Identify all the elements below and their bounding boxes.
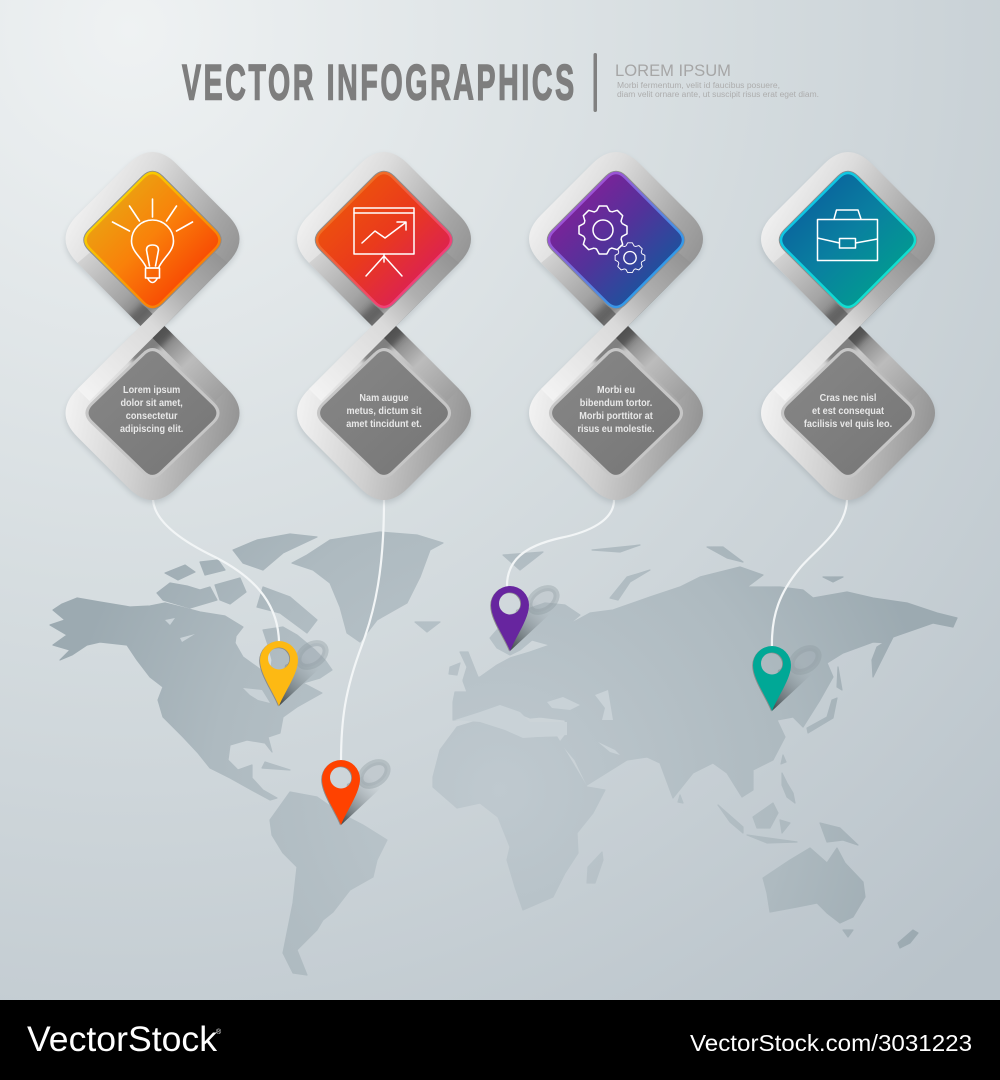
world map [50, 532, 957, 975]
line: teal pin [772, 500, 847, 648]
diamond: teal [781, 173, 915, 307]
icon: gears [579, 206, 645, 273]
map: south america [270, 792, 387, 975]
diamond rim [317, 173, 451, 307]
diamond: grey text panel [782, 350, 914, 476]
text: business: Cras nec nisl [820, 392, 877, 404]
text: settings [577, 384, 655, 435]
text: settings: Morbi eu [597, 384, 635, 396]
connector lines [153, 500, 847, 762]
text: idea: consectetur [126, 410, 178, 422]
diamond: purple [549, 173, 683, 307]
text: presentation: Nam augue [359, 392, 409, 404]
pin: teal [752, 643, 823, 712]
diamond: red [317, 173, 451, 307]
text: business: et est consequat [812, 405, 885, 417]
map: inland seas and lakes [165, 618, 620, 755]
footer registered mark: ® [216, 1028, 222, 1036]
line: purple pin [507, 500, 614, 588]
footer url: VectorStock.com/3031223 [690, 1030, 972, 1056]
title: VECTOR INFOGRAPHICS [182, 54, 574, 111]
pin: yellow [259, 638, 330, 707]
text: presentation: metus, dictum sit [346, 405, 422, 417]
subtitle block [615, 61, 819, 99]
diamond: grey text panel [87, 350, 218, 476]
text: business: facilisis vel quis leo. [804, 418, 892, 430]
map: greenland [292, 532, 443, 642]
line: red pin [341, 500, 384, 762]
map: africa [433, 720, 605, 910]
panel: settings column [529, 152, 703, 503]
diamond: orange [86, 173, 220, 307]
diamond rim [781, 173, 915, 307]
text: idea [120, 384, 184, 435]
text: presentation: amet tincidunt et. [346, 418, 422, 430]
pin: purple [490, 583, 561, 652]
icon: presentation board [354, 208, 414, 276]
subtitle block: Morbi fermentum, velit id faucibus posuere, [617, 81, 780, 90]
panel: business column [761, 152, 935, 503]
text: idea: Lorem ipsum [123, 384, 181, 396]
text: settings: risus eu molestie. [577, 423, 655, 435]
diamond rim [86, 173, 220, 307]
title divider [594, 53, 597, 112]
pin: red [321, 757, 392, 826]
text: business [804, 392, 892, 430]
map: canadian arctic islands [157, 534, 317, 633]
map: north america [50, 598, 332, 800]
text: settings: Morbi porttitor at [579, 410, 653, 422]
subtitle block: diam velit ornare ante, ut suscipit risus erat eget diam. [617, 90, 819, 99]
diamond: grey text panel [318, 350, 450, 476]
footer logo: VectorStock [27, 1020, 218, 1059]
text: idea: dolor sit amet, [120, 397, 183, 409]
footer band [0, 1000, 1000, 1080]
icon: briefcase [818, 210, 878, 260]
subtitle block: LOREM IPSUM [615, 61, 731, 80]
map: islands [262, 545, 918, 948]
diamond rim [549, 173, 683, 307]
panel: presentation column [297, 152, 471, 503]
map: eurasia [453, 567, 957, 798]
icon: light bulb [112, 199, 192, 282]
text: settings: bibendum tortor. [580, 397, 652, 409]
text: presentation [346, 392, 422, 430]
text: idea: adipiscing elit. [120, 423, 184, 435]
line: yellow pin [153, 500, 279, 642]
panel: idea column [66, 152, 240, 503]
diamond: grey text panel [550, 350, 682, 476]
